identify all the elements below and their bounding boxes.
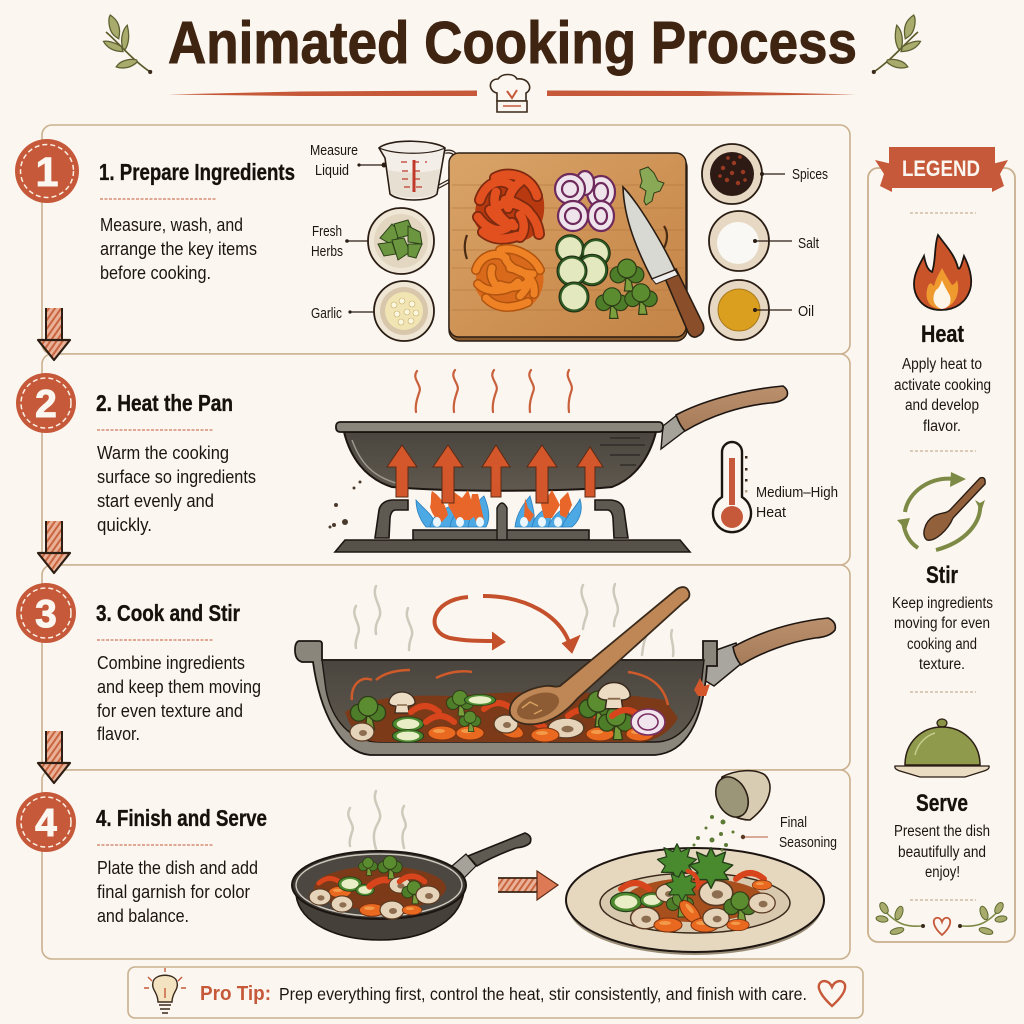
- panel: legend: [868, 147, 1015, 942]
- legend: serve: [894, 790, 990, 881]
- flames: [416, 490, 581, 527]
- heat waves: [415, 370, 572, 412]
- badge: step 1: 1: [36, 149, 58, 195]
- title: Animated Cooking Process: [168, 10, 857, 76]
- step 1 description: Measure, wash, and: [100, 214, 243, 235]
- step 4 description: final garnish for color: [97, 881, 250, 902]
- title underline right: [547, 90, 856, 96]
- small herb: [640, 167, 664, 205]
- icon: thermometer: [713, 442, 751, 532]
- legend: heat: Heat: [921, 321, 964, 348]
- step 3 description: for even texture and: [97, 700, 243, 721]
- icon: heart: [819, 981, 845, 1006]
- step 2 heading: 2. Heat the Pan: [96, 390, 233, 416]
- label: medium-high heat: [756, 485, 838, 521]
- panel: step 2 heat the pan: [42, 354, 850, 565]
- icon: salt bowl: [709, 211, 769, 271]
- label: measure liquid: Liquid: [315, 163, 349, 179]
- legend: heat: Apply heat to: [902, 356, 982, 373]
- broccoli: [596, 259, 657, 318]
- panel: step 3 cook and stir: [42, 565, 850, 770]
- badge: step 1: [15, 139, 79, 203]
- label: final seasoning: Final: [780, 815, 807, 831]
- legend: serve: enjoy!: [925, 864, 960, 881]
- frying pan: [336, 386, 788, 491]
- badge: step 3: 3: [35, 593, 57, 636]
- label: measure liquid: Measure: [310, 143, 358, 159]
- step 2 description: quickly.: [97, 514, 152, 535]
- steam: [348, 791, 406, 849]
- label: salt: [753, 236, 819, 252]
- label: garlic: Garlic: [311, 306, 342, 322]
- legend: stir: Stir: [926, 562, 958, 589]
- onion slices: [555, 171, 615, 231]
- icon: right herb sprig: [872, 15, 921, 74]
- step 2 description: surface so ingredients: [97, 466, 256, 487]
- decorative footer sprigs and heart: [876, 901, 1007, 936]
- steam: [354, 584, 673, 656]
- step 1 description: [100, 199, 257, 283]
- rising heat arrows: [387, 445, 603, 503]
- zucchini slices: [556, 235, 610, 312]
- legend: stir: texture.: [919, 656, 965, 673]
- badge: step 2: 2: [35, 383, 57, 426]
- legend: stir: moving for even: [894, 615, 990, 632]
- step 4 description: [97, 845, 258, 926]
- step 3 description: and keep them moving: [97, 676, 261, 697]
- step 1 description: arrange the key items: [100, 238, 257, 259]
- label: final seasoning: [741, 815, 837, 851]
- legend: stir: cooking and: [907, 636, 977, 653]
- title underline left: [168, 90, 477, 96]
- label: salt: Salt: [798, 236, 819, 252]
- label: measure liquid: [310, 143, 386, 179]
- icon: chef hat: [490, 74, 530, 112]
- step 1 description: before cooking.: [100, 262, 211, 283]
- badge: step 4: [16, 792, 76, 852]
- arrow: pan to plate: [498, 871, 558, 900]
- red pepper strips: [474, 174, 544, 242]
- badge: step 2: [16, 373, 76, 433]
- pro tip message: Prep everything first, control the heat, stir consistently, and finish with care.: [279, 984, 807, 1004]
- label: fresh herbs: Herbs: [311, 244, 343, 260]
- legend: serve: beautifully and: [898, 844, 986, 861]
- icon: stirring spoon: [897, 472, 985, 550]
- wok ingredients: [345, 670, 710, 742]
- legend: stir: Keep ingredients: [892, 595, 993, 612]
- pro tip label: Pro Tip:: [200, 983, 271, 1005]
- arrow: step 1 to 2: [38, 308, 70, 360]
- legend banner: [875, 147, 1008, 192]
- step 4 heading: 4. Finish and Serve: [96, 805, 267, 831]
- label: spices: Spices: [792, 167, 828, 183]
- panel: pro tip: [128, 967, 863, 1018]
- step 1 heading: 1. Prepare Ingredients: [99, 159, 295, 185]
- label: fresh herbs: Fresh: [312, 224, 342, 240]
- wooden spoon: [510, 587, 689, 725]
- panel: step 4 finish and serve: [42, 770, 850, 959]
- icon: light bulb: [144, 968, 186, 1013]
- legend: stir: [892, 562, 993, 673]
- icon: cutting board: [449, 153, 704, 341]
- label: garlic: [311, 306, 388, 322]
- icon: oil bowl: [709, 280, 769, 340]
- icon: spices bowl: [702, 144, 762, 204]
- label: oil: Oil: [798, 304, 814, 320]
- panel: step 1 prepare ingredients: [42, 125, 850, 354]
- icon: flame: [914, 235, 971, 310]
- seasoning shaker: [692, 771, 770, 852]
- legend: heat: flavor.: [923, 418, 961, 435]
- label: final seasoning: Seasoning: [779, 835, 837, 851]
- step 2 description: [97, 430, 256, 535]
- label: medium-high heat: Medium–High: [756, 485, 838, 501]
- step 4 description: and balance.: [97, 905, 189, 926]
- step 2 description: Warm the cooking: [97, 442, 229, 463]
- icon: herbs bowl: [368, 208, 434, 274]
- label: medium-high heat: Heat: [756, 505, 786, 521]
- step 4 description: Plate the dish and add: [97, 857, 258, 878]
- stir direction arrows: [435, 596, 580, 653]
- icon: garlic bowl: [374, 281, 434, 341]
- step 3 description: [97, 640, 261, 744]
- arrow: step 3 to 4: [38, 731, 70, 783]
- step 3 description: flavor.: [97, 723, 140, 744]
- plate with garnished food: [566, 844, 824, 955]
- burner: [335, 500, 690, 552]
- arrow: step 2 to 3: [38, 521, 70, 573]
- label: fresh herbs: [311, 224, 378, 260]
- legend: heat: activate cooking: [894, 377, 991, 394]
- icon: measuring cup: [379, 141, 458, 200]
- badge: step 4: 4: [35, 802, 57, 845]
- icon: left herb sprig: [103, 15, 152, 74]
- wok: [295, 618, 835, 755]
- badge: step 3: [16, 583, 76, 643]
- legend: heat: and develop: [905, 397, 979, 414]
- step 3 heading: 3. Cook and Stir: [96, 600, 240, 626]
- crumbs: [328, 480, 362, 528]
- step 3 description: Combine ingredients: [97, 652, 245, 673]
- legend: serve: Present the dish: [894, 823, 990, 840]
- orange pepper strips: [476, 248, 544, 310]
- label: spices: [760, 167, 828, 183]
- knife: [623, 187, 704, 337]
- legend banner: LEGEND: [902, 156, 980, 181]
- label: oil: [753, 304, 814, 320]
- step 2 description: start evenly and: [97, 490, 214, 511]
- legend: serve: Serve: [916, 790, 968, 817]
- icon: serving cloche: [895, 719, 989, 777]
- skillet with food: [292, 833, 531, 940]
- legend: heat: [894, 321, 991, 435]
